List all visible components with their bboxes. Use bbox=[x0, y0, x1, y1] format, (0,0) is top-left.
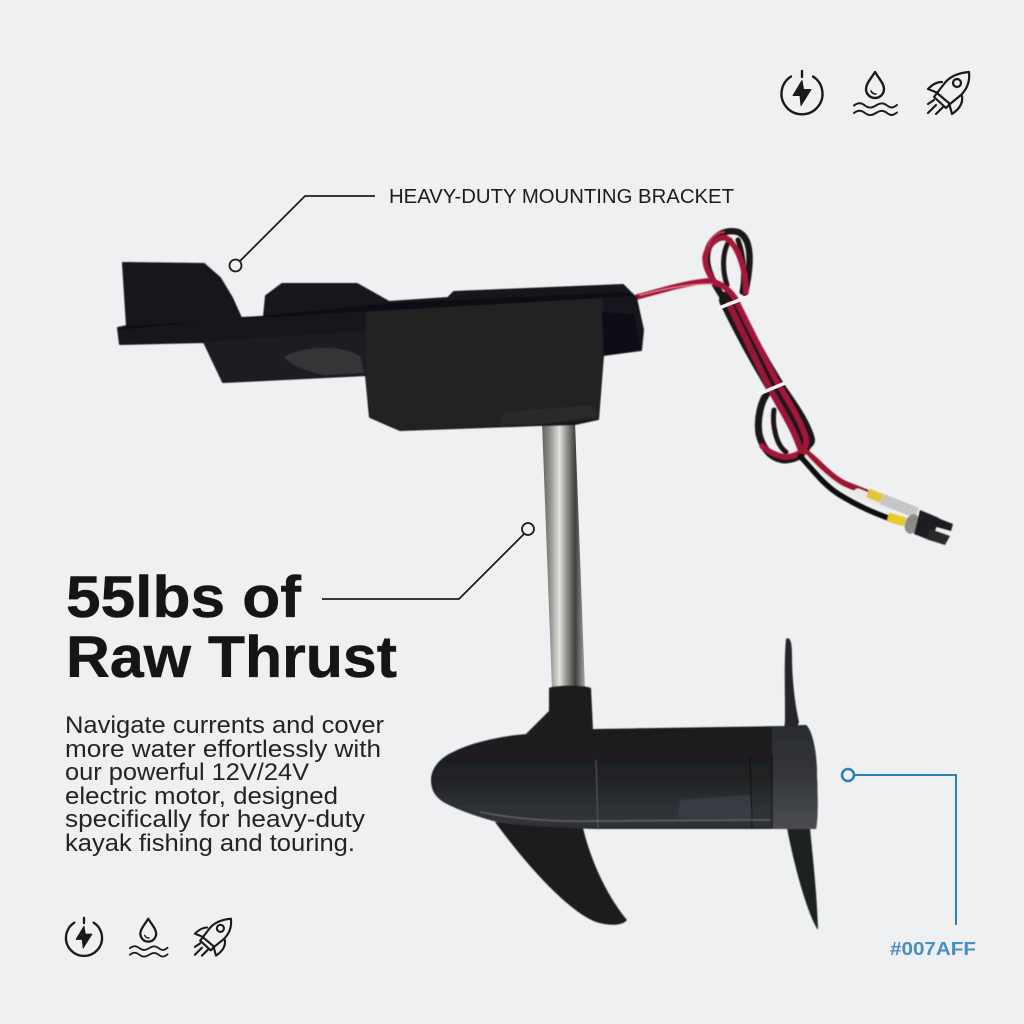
label: mounting bracket: HEAVY-DUTY MOUNTING BRACKET bbox=[389, 186, 734, 208]
icon: water drop and waves bbox=[854, 72, 897, 115]
icon: rocket small bbox=[195, 919, 231, 956]
callout leader: blue propeller bbox=[842, 769, 956, 925]
product: motor unit bbox=[431, 638, 818, 930]
product: mounting bracket and control box bbox=[118, 263, 643, 430]
callout leader: shaft bbox=[322, 523, 534, 599]
black bundle bbox=[728, 300, 806, 440]
body description: kayak fishing and touring. bbox=[65, 830, 355, 857]
rear lower propeller blade bbox=[787, 828, 818, 930]
callout leader: mounting bracket bbox=[230, 196, 375, 272]
product: power cable bbox=[637, 231, 917, 522]
lower skeg fin bbox=[495, 822, 627, 925]
label: colour code: #007AFF bbox=[890, 938, 976, 959]
icon row: top right bbox=[781, 71, 969, 115]
title: Raw Thrust bbox=[66, 625, 397, 690]
body description: electric motor, designed bbox=[65, 783, 338, 810]
product: cable ties bbox=[719, 297, 785, 394]
body description: our powerful 12V/24V bbox=[65, 759, 310, 786]
icon: water drop small bbox=[130, 919, 168, 957]
body description: Navigate currents and cover bbox=[65, 712, 384, 739]
red strands bbox=[637, 281, 806, 457]
back fin and neck bbox=[526, 710, 552, 735]
body description bbox=[65, 712, 384, 857]
icon: rocket bbox=[928, 72, 969, 114]
icon: power bolt bbox=[781, 71, 822, 114]
body highlight bbox=[678, 795, 752, 820]
body description: more water effortlessly with bbox=[65, 736, 381, 763]
motor housing bbox=[431, 725, 818, 829]
icon: power bolt small bbox=[66, 918, 102, 956]
body description: specifically for heavy-duty bbox=[65, 806, 366, 833]
tail wires bbox=[800, 456, 888, 518]
icon row: bottom left bbox=[66, 918, 231, 957]
body joints bbox=[596, 760, 598, 828]
title: 55lbs of bbox=[66, 565, 302, 630]
end cap bbox=[772, 725, 818, 829]
product: battery connector bbox=[902, 510, 953, 545]
title bbox=[66, 565, 397, 690]
rear upper propeller blade bbox=[777, 638, 799, 768]
product: stainless shaft bbox=[541, 395, 585, 690]
